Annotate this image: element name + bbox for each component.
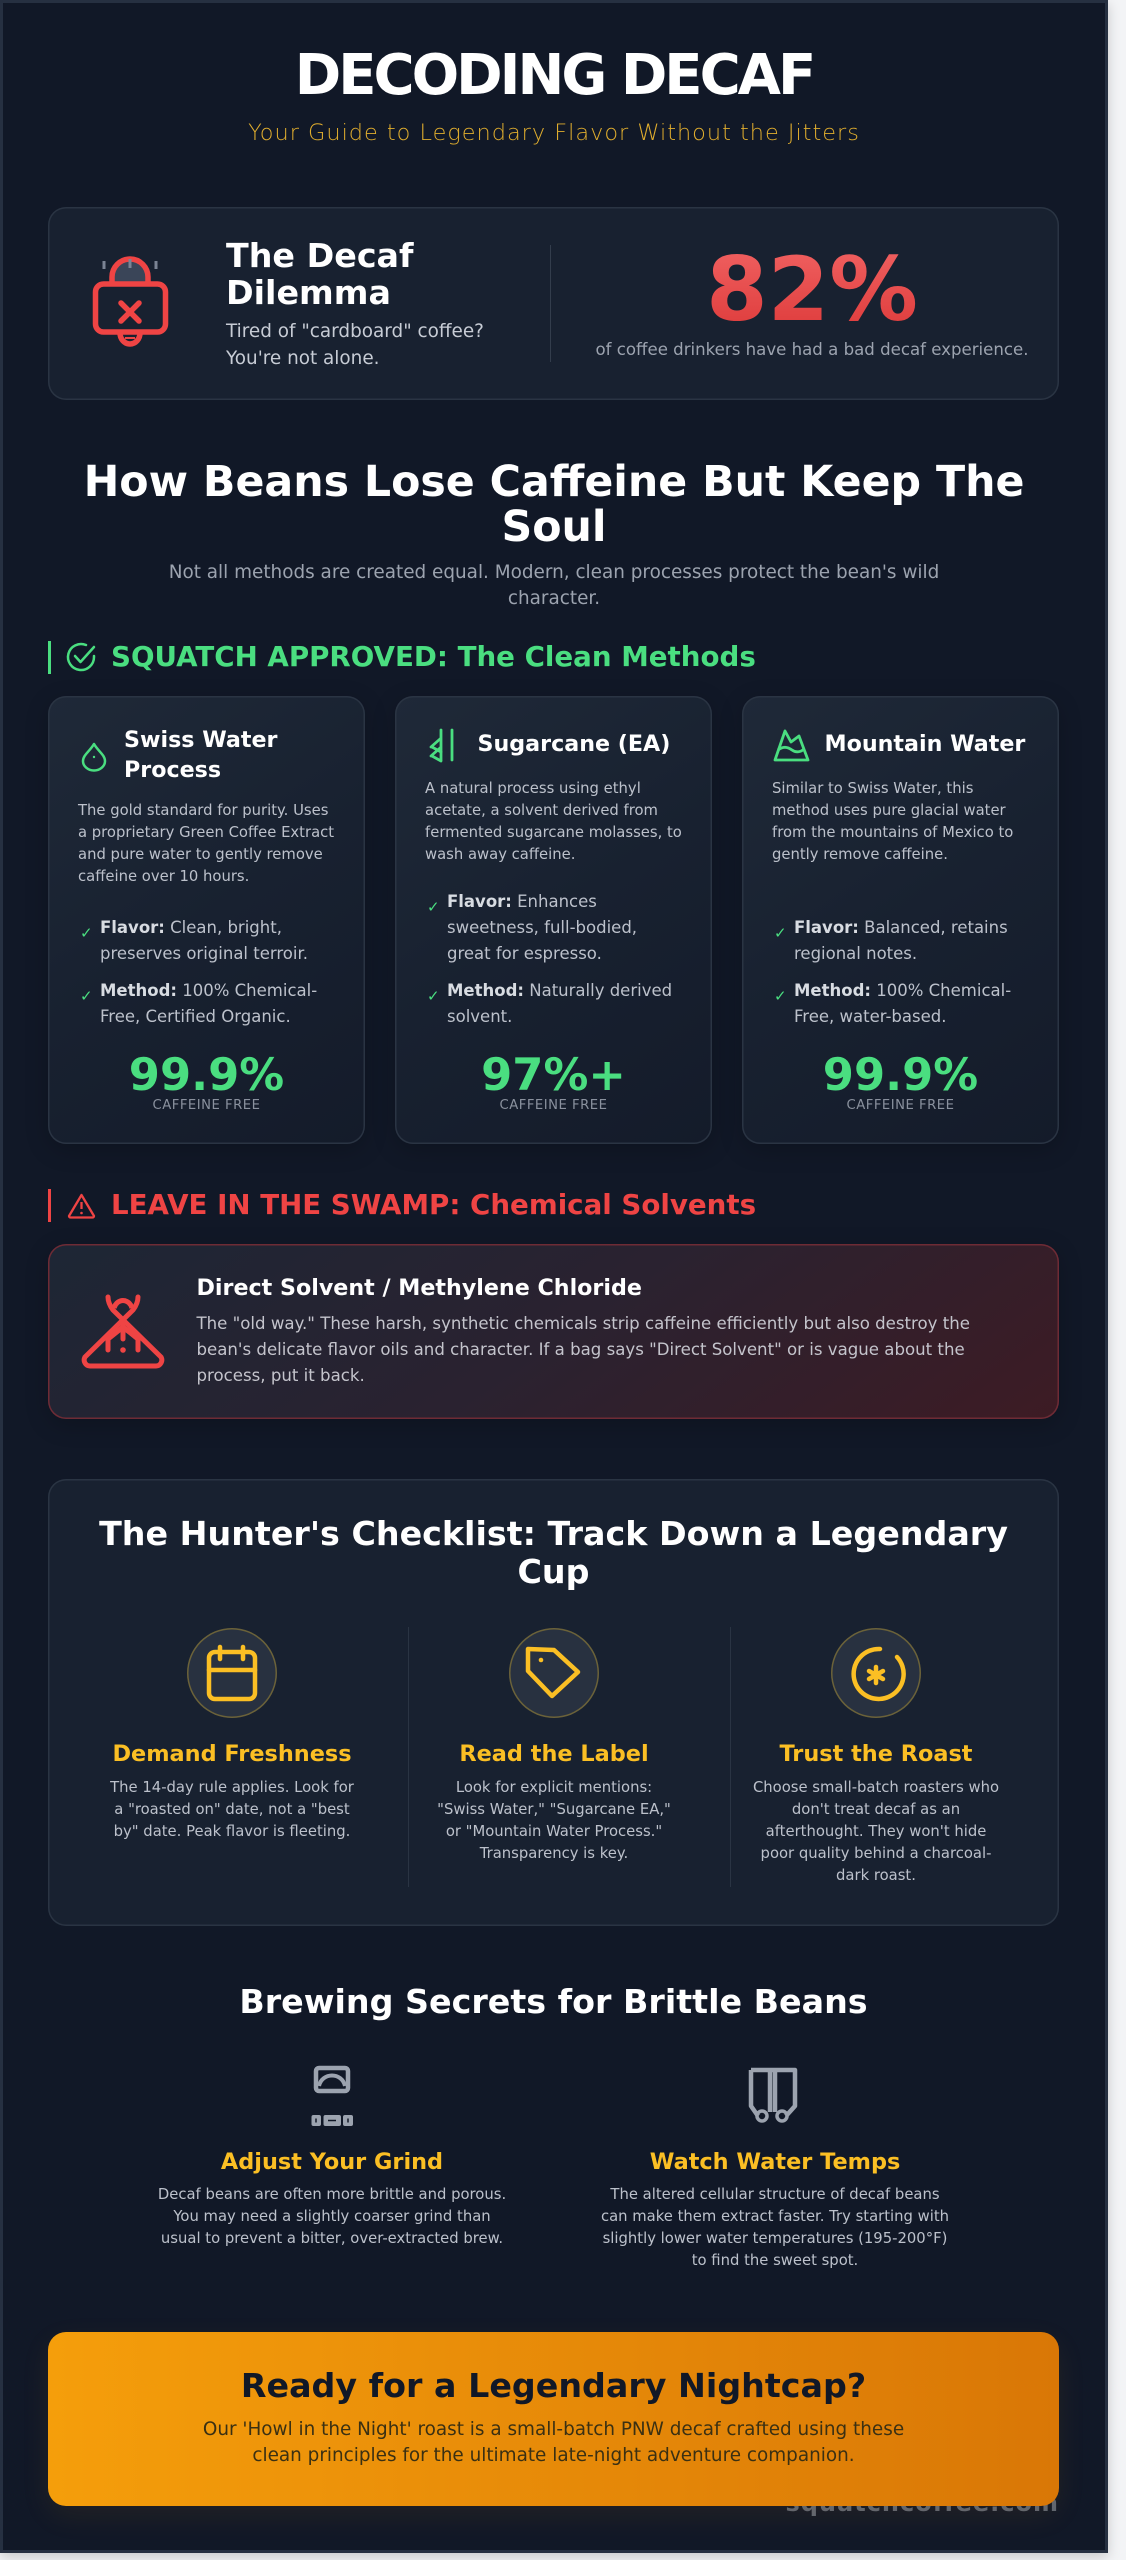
- check: ✓: [427, 987, 440, 1005]
- cta text: Our 'Howl in the Night' roast is a small-batch PNW decaf crafted using these: [203, 2419, 904, 2440]
- icon: flask hazard: [82, 1294, 164, 1368]
- description: Similar to Swiss Water, this: [772, 780, 973, 797]
- panel: direct solvent: [48, 1244, 1059, 1419]
- tip text: [575, 2184, 975, 2272]
- icon: tag: [526, 1646, 580, 1698]
- tip title: Adjust Your Grind: [221, 2148, 443, 2174]
- method: solvent.: [447, 1006, 512, 1026]
- column: read the label: [437, 1628, 671, 1862]
- heading: leave in the swamp: [48, 1188, 756, 1222]
- description: process, put it back.: [196, 1366, 365, 1385]
- column text: Look for explicit mentions:: [456, 1779, 652, 1796]
- column text: poor quality behind a charcoal-: [761, 1845, 991, 1862]
- card title: Mountain Water: [824, 731, 1025, 757]
- card title: Swiss Water: [124, 727, 277, 753]
- column: trust the roast: [753, 1628, 999, 1884]
- flavor: Flavor: Enhances: [447, 892, 597, 910]
- icon: calendar: [206, 1644, 258, 1702]
- tip text: You may need a slightly coarser grind than: [173, 2208, 491, 2225]
- check: ✓: [774, 987, 787, 1005]
- icon circle: [831, 1628, 921, 1718]
- text: You're not alone.: [226, 348, 379, 369]
- card title: Process: [124, 757, 221, 783]
- section subtext: [169, 562, 939, 609]
- cta text: [48, 2417, 1059, 2469]
- column text: by" date. Peak flavor is fleeting.: [114, 1823, 350, 1840]
- cta heading: Ready for a Legendary Nightcap?: [241, 2366, 866, 2404]
- tip text: Decaf beans are often more brittle and porous.: [158, 2186, 506, 2203]
- column text: Transparency is key.: [480, 1845, 628, 1862]
- section heading: brewing secrets: Brewing Secrets for Brittle Beans: [239, 1982, 868, 2020]
- call to action: [48, 2332, 1059, 2506]
- description: A natural process using ethyl: [425, 780, 641, 797]
- icon: grinder: [312, 2066, 353, 2126]
- heading: The Decaf: [226, 236, 414, 274]
- column text: afterthought. They won't hide: [766, 1823, 986, 1840]
- column text: Choose small-batch roasters who: [753, 1779, 999, 1796]
- method: [447, 980, 672, 1026]
- description: The gold standard for purity. Uses: [78, 802, 328, 819]
- column text: dark roast.: [836, 1867, 916, 1884]
- icon circle: [509, 1628, 599, 1718]
- method: Free, water-based.: [794, 1006, 946, 1026]
- tip text: The altered cellular structure of decaf beans: [610, 2186, 940, 2203]
- panel: hunter's checklist: [48, 1479, 1059, 1926]
- icon: thermometers: [748, 2068, 798, 2123]
- text: [226, 321, 484, 369]
- heading text: SQUATCH APPROVED: The Clean Methods: [111, 640, 756, 673]
- icon circle: [187, 1628, 277, 1718]
- flavor: [447, 892, 637, 962]
- description: caffeine over 10 hours.: [78, 868, 249, 885]
- description: [772, 780, 1013, 863]
- column text: [110, 1779, 354, 1840]
- stat: 97%+: [481, 1048, 626, 1100]
- cta text: clean principles for the ultimate late-night adventure companion.: [252, 2445, 855, 2466]
- tip text: can make them extract faster. Try starting with: [601, 2208, 949, 2225]
- tip text: [158, 2186, 506, 2247]
- card title: Sugarcane (EA): [478, 731, 670, 757]
- icon: warning triangle: [68, 1194, 96, 1219]
- icon: roast dial: [851, 1646, 906, 1702]
- method: [100, 980, 317, 1026]
- divider: [730, 1627, 731, 1887]
- icon: mountain: [774, 730, 810, 762]
- accent bar: [48, 1189, 51, 1222]
- column text: or "Mountain Water Process.": [446, 1823, 662, 1840]
- description: method uses pure glacial water: [772, 802, 1006, 819]
- panel heading: The Hunter's Checklist: Track Down a Legendary: [99, 1514, 1008, 1553]
- stat: 99.9%: [823, 1048, 978, 1100]
- column text: [753, 1779, 999, 1884]
- column title: Read the Label: [459, 1741, 649, 1767]
- accent bar: [48, 641, 51, 674]
- flavor: Flavor: Clean, bright,: [100, 918, 282, 936]
- heading: squatch approved: [48, 640, 756, 674]
- tip text: slightly lower water temperatures (195-200°F): [603, 2230, 947, 2247]
- flavor: great for espresso.: [447, 944, 602, 962]
- stat: 82%: 82%: [706, 238, 918, 341]
- check: ✓: [80, 924, 93, 942]
- divider: [408, 1627, 409, 1887]
- tip title: Watch Water Temps: [650, 2148, 900, 2174]
- tip: adjust your grind: [158, 2066, 506, 2247]
- description: and pure water to gently remove: [78, 846, 323, 863]
- flavor: preserves original terroir.: [100, 944, 308, 962]
- description: wash away caffeine.: [425, 846, 575, 863]
- tip: watch water temps: [601, 2068, 949, 2269]
- title: DECODING DECAF: [295, 43, 813, 108]
- description: gently remove caffeine.: [772, 846, 948, 863]
- tip text: usual to prevent a bitter, over-extracted brew.: [161, 2230, 503, 2247]
- panel heading: Cup: [518, 1552, 589, 1591]
- icon: locked bag: [92, 256, 168, 347]
- check: ✓: [774, 924, 787, 942]
- stat label: CAFFEINE FREE: [153, 1098, 260, 1113]
- section heading: [84, 457, 1024, 552]
- check: ✓: [427, 898, 440, 916]
- method: [794, 980, 1011, 1026]
- panel: sugarcane: [395, 696, 712, 1144]
- footer watermark: squatchcoffee.com: [785, 2489, 1059, 2517]
- description: [78, 802, 334, 885]
- description: from the mountains of Mexico to: [772, 824, 1013, 841]
- description: fermented sugarcane molasses, to: [425, 824, 682, 841]
- check: ✓: [80, 987, 93, 1005]
- description: The "old way." These harsh, synthetic chemicals strip caffeine efficiently but also destroy the: [196, 1314, 970, 1333]
- flavor: [794, 918, 1008, 962]
- stat label: of coffee drinkers have had a bad decaf experience.: [596, 340, 1028, 359]
- method: Method: 100% Chemical-: [794, 980, 1011, 1000]
- description: [196, 1314, 970, 1385]
- flavor: sweetness, full-bodied,: [447, 918, 637, 936]
- method: Free, Certified Organic.: [100, 1006, 291, 1026]
- section heading: Soul: [501, 502, 607, 552]
- heading: Dilemma: [226, 272, 391, 312]
- card title: Direct Solvent / Methylene Chloride: [196, 1275, 642, 1301]
- column text: "Swiss Water," "Sugarcane EA,": [437, 1801, 671, 1818]
- panel: decaf dilemma: [48, 207, 1059, 400]
- section subtext: Not all methods are created equal. Modern, clean processes protect the bean's wild: [169, 562, 939, 583]
- column text: [437, 1779, 671, 1862]
- stat label: CAFFEINE FREE: [847, 1098, 954, 1113]
- column title: Demand Freshness: [112, 1741, 352, 1767]
- flavor: regional notes.: [794, 944, 917, 962]
- description: a proprietary Green Coffee Extract: [78, 824, 334, 841]
- panel: mountain water: [742, 696, 1059, 1144]
- column text: The 14-day rule applies. Look for: [110, 1779, 354, 1796]
- tip text: to find the sweet spot.: [692, 2252, 858, 2269]
- method: Method: 100% Chemical-: [100, 980, 317, 1000]
- column: demand freshness: [110, 1628, 354, 1840]
- column text: a "roasted on" date, not a "best: [114, 1801, 350, 1818]
- section heading: How Beans Lose Caffeine But Keep The: [84, 457, 1024, 507]
- icon: check circle: [66, 642, 96, 672]
- heading: [226, 236, 414, 312]
- panel: swiss water: [48, 696, 365, 1144]
- flavor: [100, 918, 308, 962]
- description: acetate, a solvent derived from: [425, 802, 658, 819]
- column text: don't treat decaf as an: [792, 1801, 960, 1818]
- description: bean's delicate flavor oils and character. If a bag says "Direct Solvent" or is vague about the: [196, 1340, 965, 1359]
- text: Tired of "cardboard" coffee?: [226, 321, 484, 342]
- method: Method: Naturally derived: [447, 980, 672, 1000]
- description: [425, 780, 682, 863]
- panel heading: [99, 1514, 1008, 1591]
- divider: [550, 245, 551, 362]
- flavor: Flavor: Balanced, retains: [794, 918, 1008, 936]
- stat label: CAFFEINE FREE: [500, 1098, 607, 1113]
- card title: [124, 727, 278, 783]
- heading text: LEAVE IN THE SWAMP: Chemical Solvents: [111, 1188, 756, 1221]
- subtitle: Your Guide to Legendary Flavor Without the Jitters: [248, 120, 860, 146]
- icon: sugarcane: [430, 728, 454, 762]
- section subtext: character.: [508, 588, 600, 609]
- stat: 99.9%: [129, 1048, 284, 1100]
- icon: drop: [82, 742, 106, 772]
- column title: Trust the Roast: [779, 1741, 972, 1767]
